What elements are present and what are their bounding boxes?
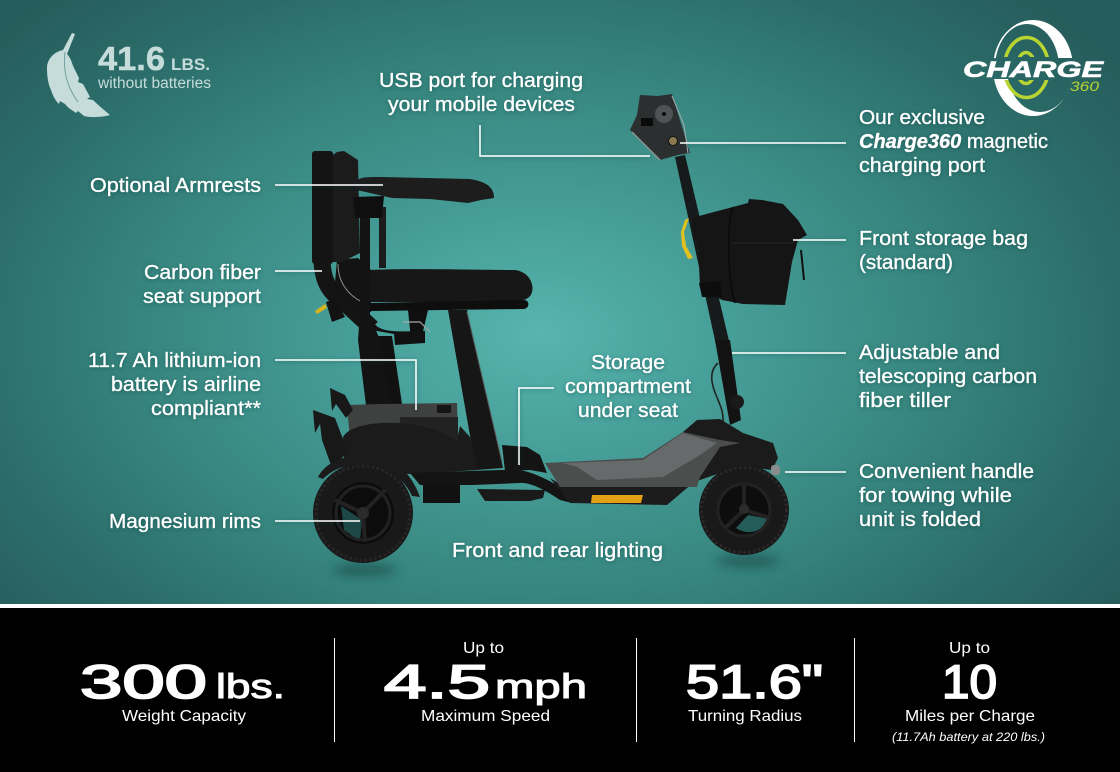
stat: miles per charge: Up to [949,640,990,657]
callout: Charge360 port: charging port [859,154,985,177]
seat cushion [370,269,532,302]
icon: feather [47,33,110,117]
callout: USB port: USB port for charging [379,69,583,92]
wheel shadows [333,554,780,577]
callout: storage compartment: compartment [565,375,691,398]
rear housing [343,423,478,474]
callout: bag: (standard) [859,251,953,274]
white band [0,604,1120,608]
logo rings [993,20,1073,116]
weight unit: LBS. [171,55,210,74]
stat: maximum speed: Up to [463,640,504,657]
stat: miles per charge: 10 [942,655,997,708]
yellow lever [681,218,693,259]
tiller head [630,94,690,160]
spec bar [0,608,1120,772]
reflector [591,495,643,503]
rear seat frame [322,207,503,470]
callout: battery: 11.7 Ah lithium-ion [88,349,261,372]
divider [334,638,335,742]
illustration: folding mobility scooter [312,94,807,577]
callout: USB port [379,69,650,156]
battery pack [347,403,458,440]
background panel [0,0,1120,604]
divider [636,638,637,742]
rear wheel [313,463,413,563]
stat: maximum speed: 4.5 [384,655,490,708]
armrest [353,177,494,218]
stat: maximum speed: Maximum Speed [421,708,550,725]
callout: Charge360 port [680,106,1048,177]
weight badge [47,33,211,117]
logo wordmark: CHARGE [963,57,1105,82]
callout: tiller [732,341,1037,412]
callout: bag [793,227,1028,274]
storage tray [477,445,547,501]
callout: battery: compliant** [151,397,261,420]
callout: Charge360 port: Our exclusive [859,106,985,129]
callout: towing handle [785,460,1034,531]
callout: tiller: telescoping carbon [859,365,1037,388]
seat pan [370,300,528,311]
stat: miles per charge: (11.7Ah battery at 220 lbs.) [892,730,1045,744]
callout: towing handle: for towing while [859,484,1012,507]
weight note: without batteries [97,75,211,92]
tiller joint [730,395,744,409]
callout: towing handle: unit is folded [859,508,981,531]
upper tiller [675,155,730,345]
weight value: 41.6 [98,40,165,77]
callout: USB port: your mobile devices [388,93,575,116]
callout: battery [88,349,416,420]
logo: Charge360 [963,20,1105,116]
callout: armrests: Optional Armrests [90,174,261,197]
stat: maximum speed [384,640,587,725]
callout: storage compartment: Storage [591,351,665,374]
tiller cable [712,363,723,424]
back pad [312,151,333,264]
stat: miles per charge [892,640,1045,744]
seat latch [315,299,430,345]
callout: battery: battery is airline [111,373,261,396]
stat: weight capacity: 300 [80,655,207,708]
stat: weight capacity: Weight Capacity [122,708,246,725]
logo 360: 360 [1070,78,1099,94]
stat: miles per charge: Miles per Charge [905,708,1035,725]
callout: rims: Magnesium rims [109,510,261,533]
rear fender [318,455,420,497]
tow handles [313,388,353,468]
callout: seat support: seat support [143,285,261,308]
callout: seat support [143,261,322,308]
stat: turning radius [686,655,823,725]
stat: turning radius: Turning Radius [688,708,802,725]
lower tiller [715,340,741,425]
callout: tiller: Adjustable and [859,341,1000,364]
chassis beam [410,470,572,503]
under box [423,485,460,503]
front storage bag [692,199,807,305]
callout: storage compartment: under seat [578,399,678,422]
floor deck [545,432,740,505]
callout: seat support: Carbon fiber [144,261,261,284]
front fairing [683,419,778,480]
stat: maximum speed: mph [495,668,587,706]
backrest [333,151,360,262]
callout: storage compartment [519,351,691,465]
stat: turning radius: 51.6" [686,655,823,708]
stat: weight capacity [80,655,285,725]
callout: towing handle: Convenient handle [859,460,1034,483]
stat: weight capacity: lbs. [216,668,285,706]
callouts [88,69,1048,562]
callout: lighting: Front and rear lighting [452,539,663,562]
callout: Charge360 port: Charge360 magnetic [859,130,1048,153]
front wheel [699,465,789,555]
divider [854,638,855,742]
callout: bag: Front storage bag [859,227,1028,250]
towing handle [771,465,780,475]
callout: tiller: fiber tiller [859,389,951,412]
